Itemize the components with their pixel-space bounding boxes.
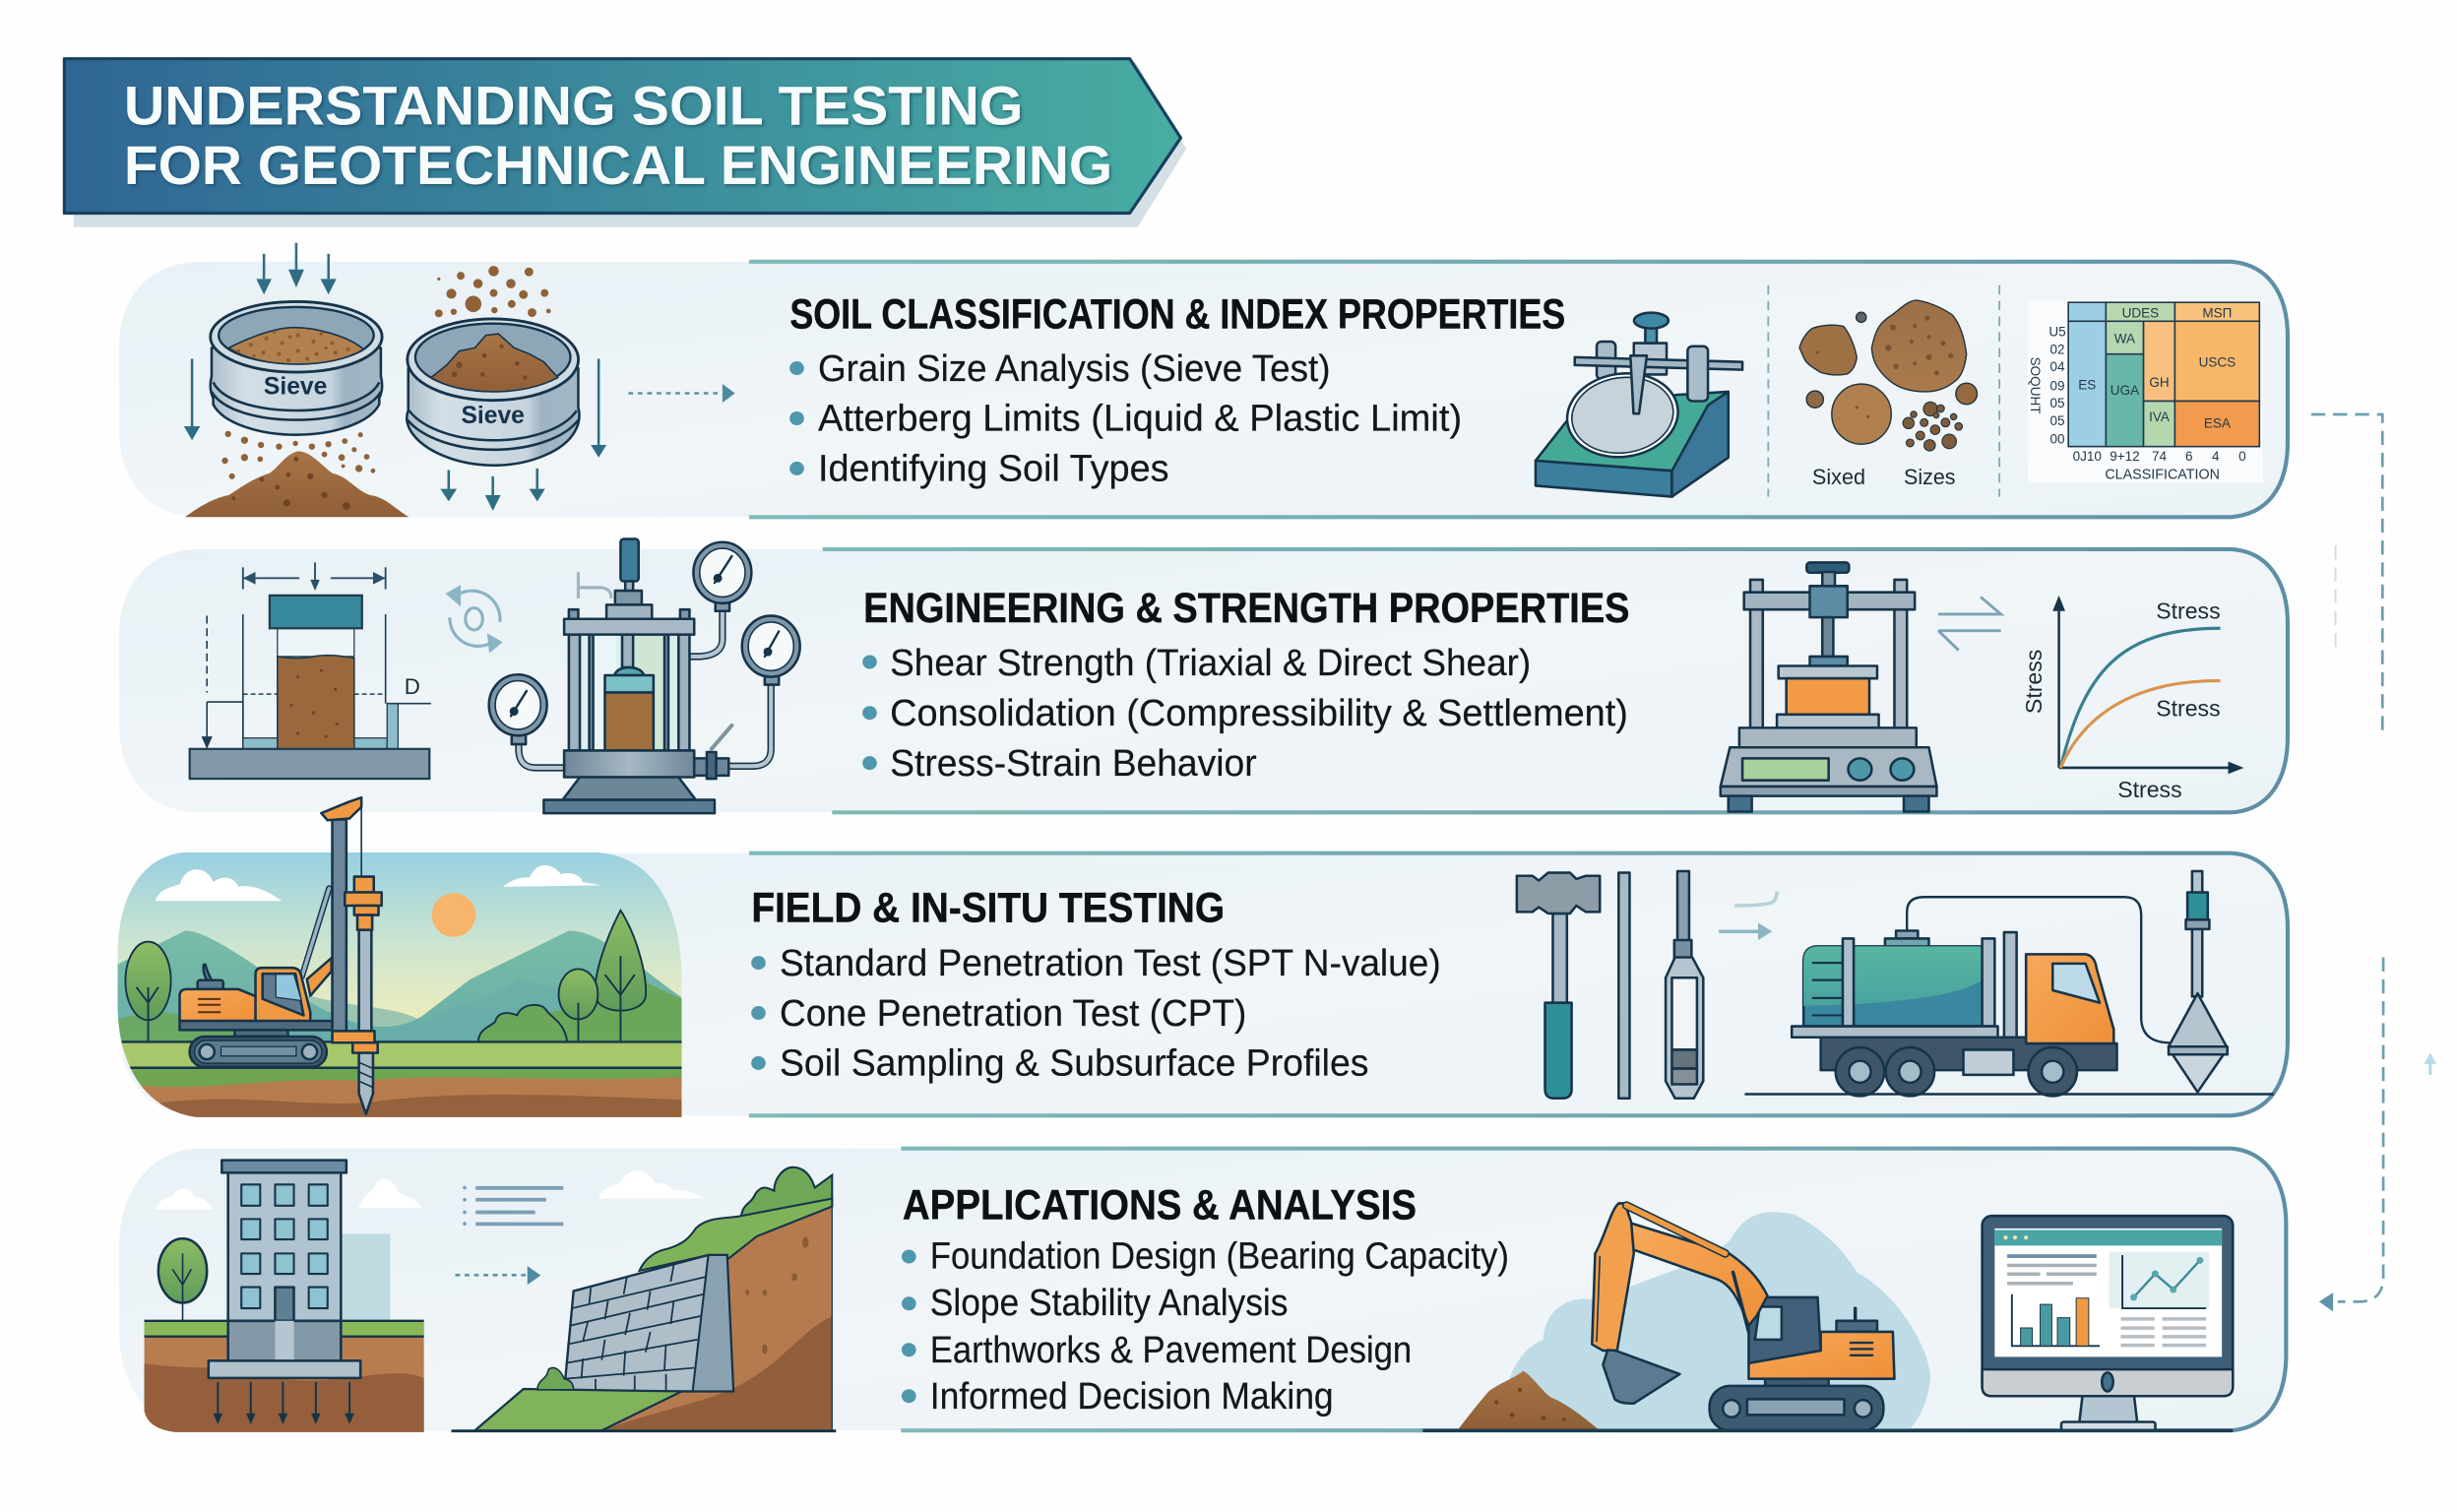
title banner <box>64 59 1186 227</box>
arrow: to text <box>628 384 735 403</box>
label: D: D <box>405 674 420 699</box>
chart: soil classification: ES <box>2078 378 2096 393</box>
chart: soil classification: 6 <box>2185 449 2192 464</box>
chart: soil classification <box>2028 301 2263 482</box>
icon: split-spoon sampler <box>1666 871 1703 1099</box>
icon: falling particles <box>221 266 551 479</box>
title text: FOR GEOTECHNICAL ENGINEERING <box>124 135 1112 196</box>
illustration: excavator and soil pile <box>1457 1203 1930 1430</box>
arrow: tools to truck <box>1719 892 1777 940</box>
bullet list: Standard Penetration Test (SPT N-value) <box>780 942 1441 984</box>
ground line <box>1422 1429 2233 1431</box>
bullet list: Shear Strength (Triaxial & Direct Shear) <box>890 642 1531 684</box>
bullet list: Identifying Soil Types <box>818 448 1169 490</box>
icon: SPT hammer <box>1517 873 1600 1099</box>
bullet list: Soil Sampling & Subsurface Profiles <box>780 1042 1368 1085</box>
icon: computer monitor with dashboard <box>1983 1216 2233 1430</box>
icon: oedometer consolidation cell <box>190 562 431 779</box>
chart: soil classification: MSΠ <box>2202 305 2232 320</box>
chart: stress-strain curves: Stress <box>2117 777 2182 802</box>
chart: soil classification: 05 <box>2049 413 2065 428</box>
chart: soil classification: 00 <box>2049 431 2065 446</box>
icon: exchange arrows <box>1938 597 2001 651</box>
bullet list: Informed Decision Making <box>930 1375 1334 1418</box>
panel: engineering and strength properties <box>119 539 2288 813</box>
icon: sieve with fine soil <box>211 301 382 435</box>
chart: soil classification: CLASSIFICATION <box>2105 467 2220 482</box>
chart: soil classification: 05 <box>2049 396 2065 410</box>
chart: soil classification: WA <box>2114 332 2135 346</box>
icon: CPT truck <box>1792 897 2169 1096</box>
label: sizes: Sizes <box>1904 465 1956 489</box>
ground line <box>1744 1093 2274 1095</box>
icon: arrows into sieve <box>184 243 606 511</box>
icon: sieve with coarse soil <box>407 319 580 466</box>
chart: stress-strain curves <box>2021 596 2243 802</box>
chart: soil classification: 4 <box>2212 449 2220 464</box>
icon: Casagrande liquid limit device <box>1536 313 1742 497</box>
icon: list lines <box>463 1186 563 1226</box>
chart: soil classification: 0J10 <box>2073 449 2102 464</box>
chart: stress-strain curves: Stress <box>2156 598 2221 624</box>
chart: soil classification: 0 <box>2238 449 2246 464</box>
icon: soil grains <box>1799 300 1978 451</box>
chart: stress-strain curves: Stress <box>2156 695 2221 721</box>
bullet list: Stress-Strain Behavior <box>890 742 1257 785</box>
chart: soil classification: 04 <box>2049 359 2065 374</box>
bullet list: Consolidation (Compressibility & Settlement) <box>890 692 1628 734</box>
sieve label: Sieve <box>461 403 525 429</box>
chart: soil classification: U5 <box>2048 324 2066 339</box>
chart: soil classification: 09 <box>2049 378 2065 393</box>
bullet list <box>751 942 1441 1085</box>
bullet list: Grain Size Analysis (Sieve Test) <box>818 347 1330 390</box>
chart: soil classification: UGA <box>2110 383 2139 398</box>
chart: soil classification: SOQUHT <box>2028 357 2043 413</box>
bullet list: Cone Penetration Test (CPT) <box>780 992 1246 1035</box>
chart: stress-strain curves: Stress <box>2021 650 2047 714</box>
chart: soil classification: GH <box>2149 375 2170 390</box>
heading: FIELD & IN-SITU TESTING <box>751 885 1225 931</box>
connector: dashed flow arrow <box>2311 414 2436 1311</box>
icon: triaxial cell <box>519 539 771 813</box>
icon: soil pile <box>185 451 410 517</box>
title text: UNDERSTANDING SOIL TESTING <box>124 76 1023 137</box>
bullet list: Earthworks & Pavement Design <box>930 1329 1412 1371</box>
icon: pressure gauges <box>489 542 800 744</box>
chart: soil classification: 74 <box>2152 449 2167 464</box>
bullet list <box>902 1234 1509 1418</box>
panel: field and in-situ testing <box>110 797 2288 1120</box>
icon: rotation cycle <box>448 588 500 651</box>
bullet list: Atterberg Limits (Liquid & Plastic Limit) <box>818 398 1462 440</box>
heading: APPLICATIONS & ANALYSIS <box>903 1181 1417 1228</box>
arrow: building to slope <box>455 1266 540 1285</box>
chart: soil classification: UDES <box>2122 305 2159 320</box>
illustration: building on foundation <box>141 1161 426 1433</box>
heading: ENGINEERING & STRENGTH PROPERTIES <box>863 585 1629 631</box>
chart: soil classification: 9+12 <box>2110 449 2140 464</box>
sieve label: Sieve <box>264 373 327 400</box>
chart: soil classification: IVA <box>2149 410 2170 424</box>
illustration: field scene with drilling rig <box>110 797 689 1120</box>
icon: loading press <box>1721 562 1936 812</box>
bullet list: Foundation Design (Bearing Capacity) <box>930 1234 1509 1277</box>
panel: applications and analysis <box>119 1149 2286 1433</box>
chart: soil classification: USCS <box>2199 354 2236 369</box>
chart: soil classification: 02 <box>2049 343 2065 357</box>
bullet list <box>789 347 1462 490</box>
icon: CPT cone probe <box>2169 871 2228 1092</box>
bullet list: Slope Stability Analysis <box>930 1282 1288 1324</box>
bullet list <box>862 642 1628 785</box>
illustration: retaining wall and slope <box>452 1167 836 1431</box>
label: sixed: Sixed <box>1812 465 1865 489</box>
heading: SOIL CLASSIFICATION & INDEX PROPERTIES <box>789 290 1565 337</box>
panel: soil classification and index properties <box>119 243 2288 517</box>
chart: soil classification: ESA <box>2204 416 2231 431</box>
icon: drill rod <box>1618 873 1629 1099</box>
divider <box>1768 285 1999 497</box>
